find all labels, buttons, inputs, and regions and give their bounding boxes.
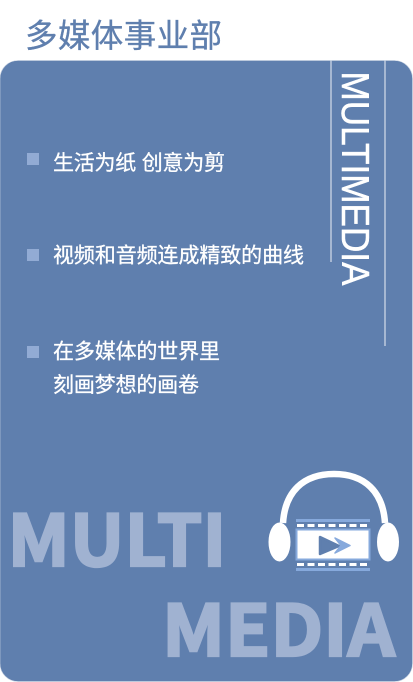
- bullet item 3: 在多媒体的世界里: [53, 340, 220, 364]
- film strip: [296, 519, 370, 571]
- bullet item 2: 视频和音频连成精致的曲线: [53, 244, 304, 268]
- bullet item 1: 生活为纸 创意为剪: [53, 152, 225, 175]
- icon: headphones with film strip: [268, 474, 399, 571]
- watermark word: MULTI: MULTI: [8, 485, 226, 587]
- bullet item 3: [27, 340, 220, 397]
- ear cups: [268, 522, 399, 562]
- bullet item 3: 刻画梦想的画卷: [53, 374, 199, 397]
- vertical heading with rules: MULTIMEDIA: [333, 72, 376, 286]
- bullet list: [27, 152, 304, 397]
- watermark word: MEDIA: MEDIA: [162, 575, 395, 677]
- play symbol: [320, 537, 350, 554]
- headband: [283, 474, 385, 523]
- title: 多媒体事业部: [25, 18, 222, 54]
